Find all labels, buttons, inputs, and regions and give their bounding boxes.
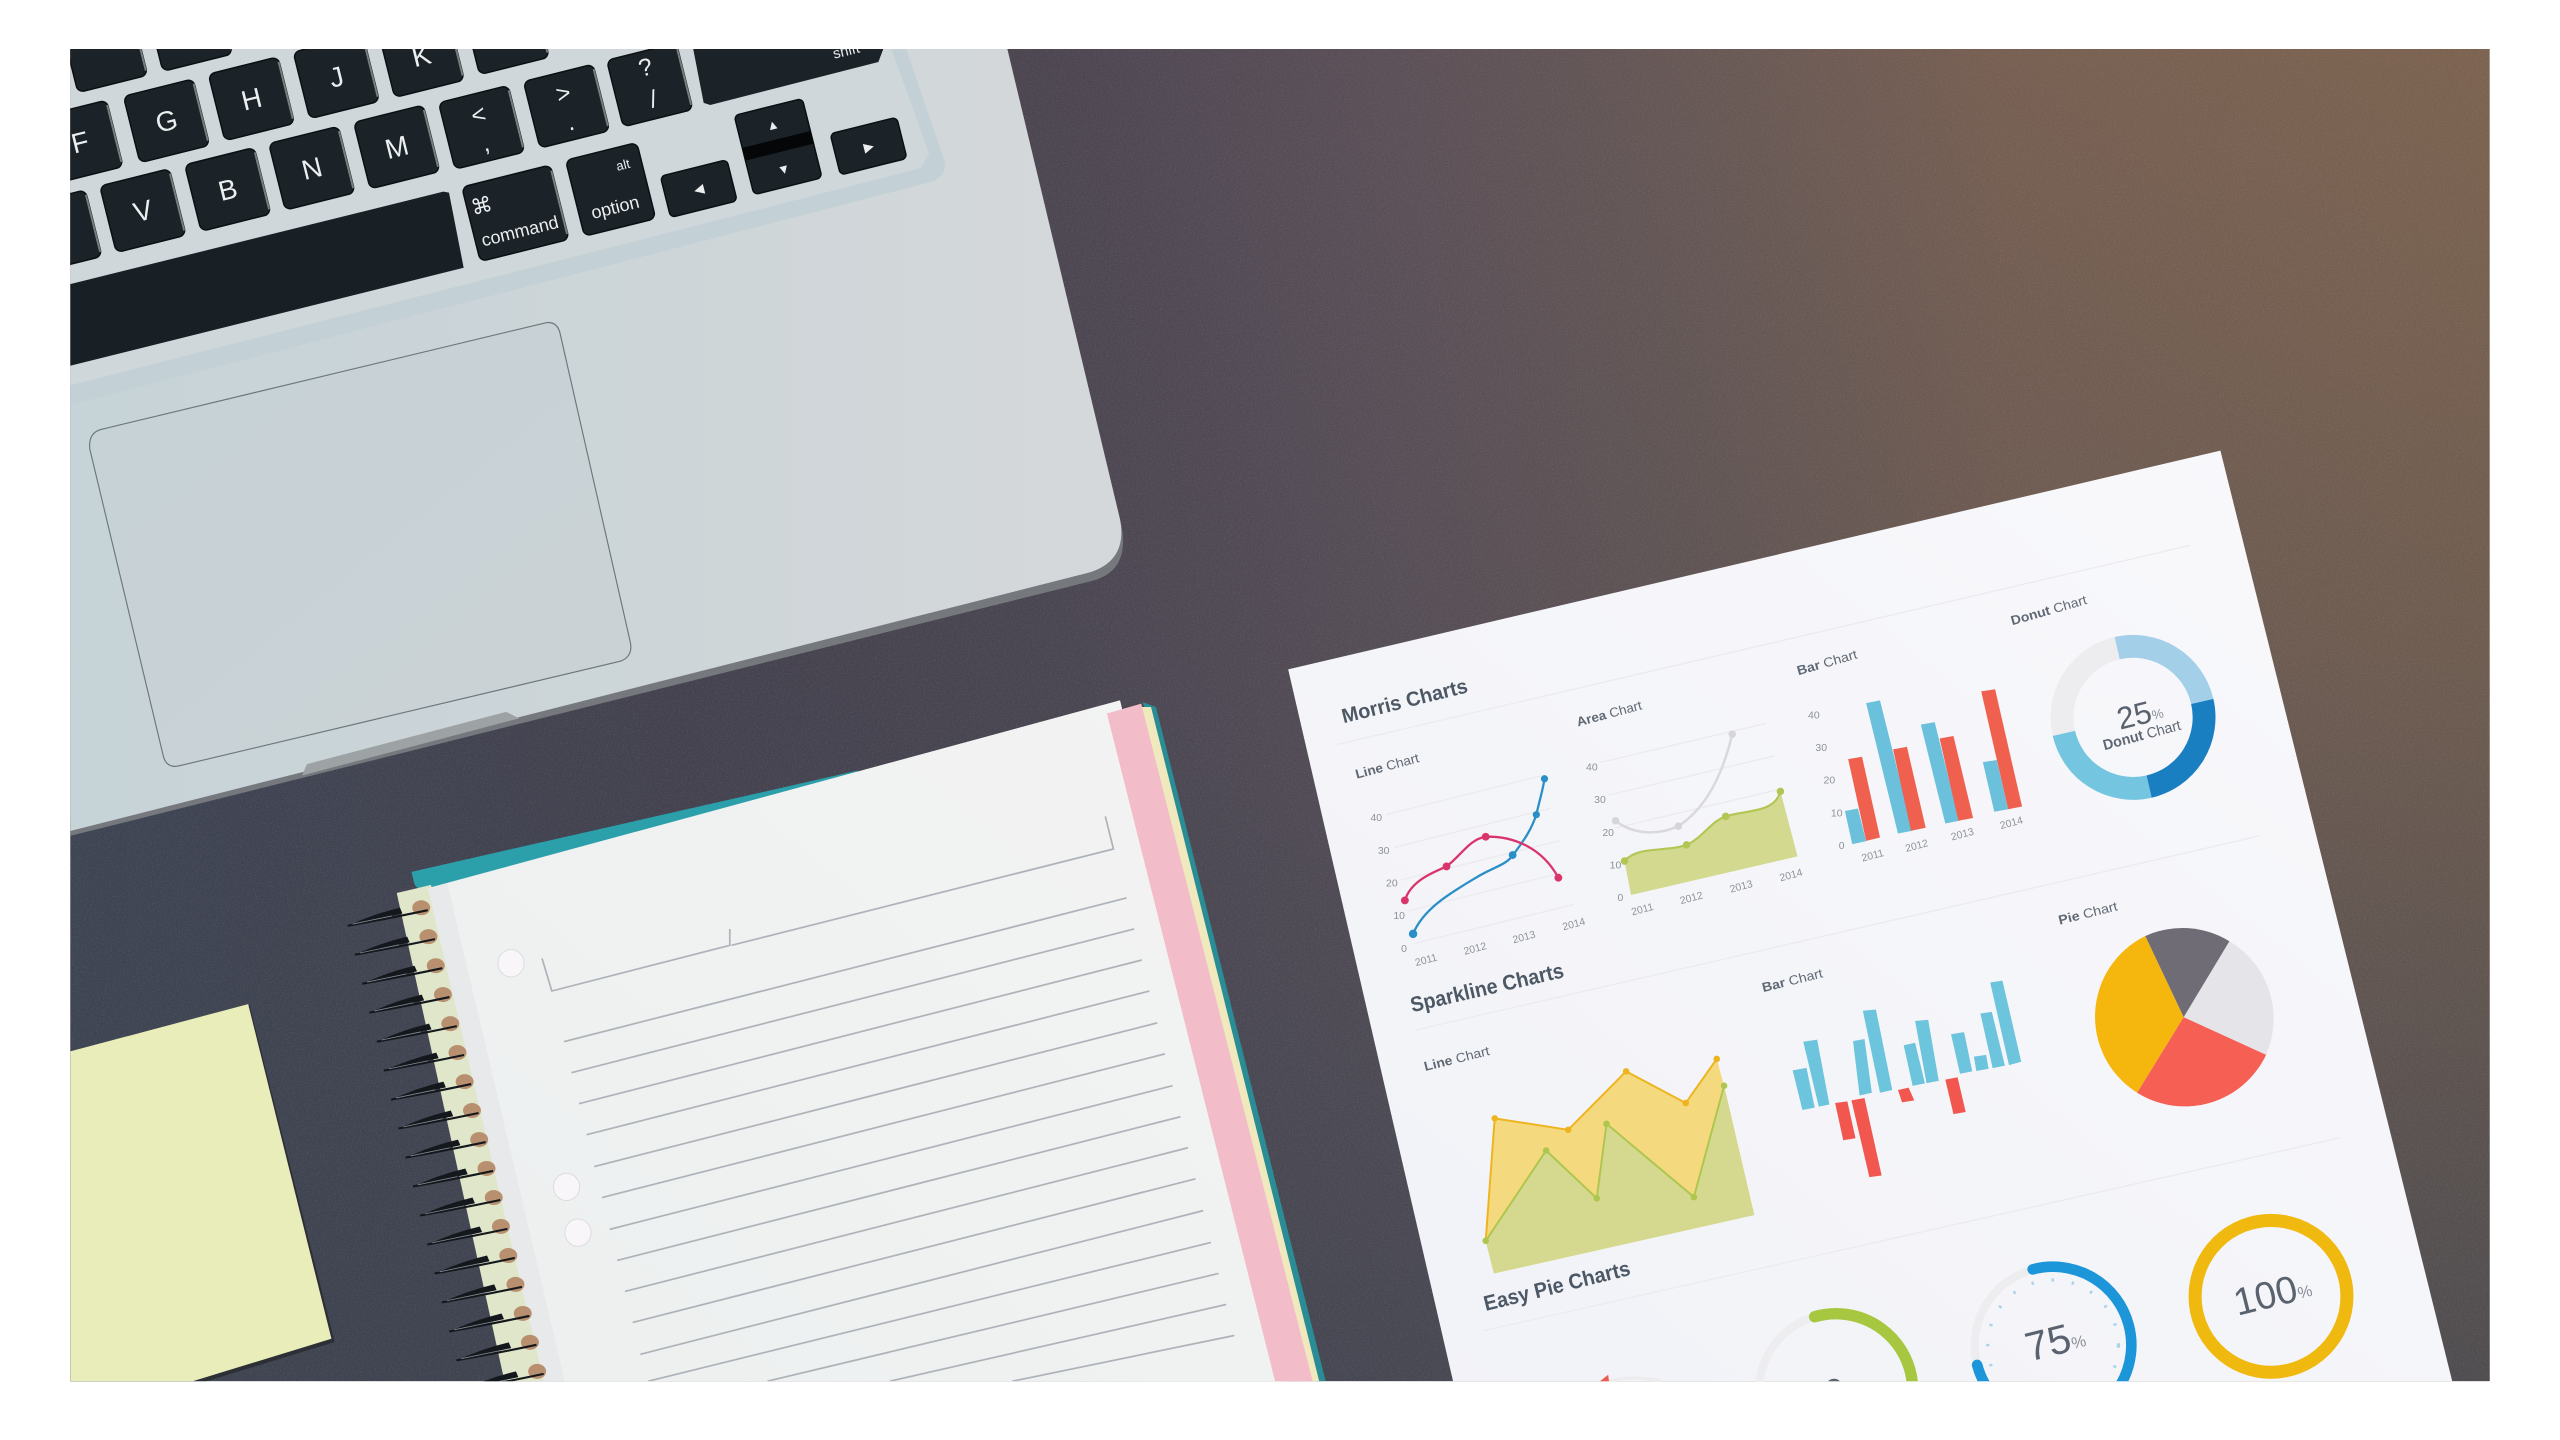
option key: option <box>589 192 641 223</box>
bar chart: 2013 <box>1950 827 1975 843</box>
keyboard well rim <box>458 49 945 304</box>
keyboard keys <box>70 49 907 366</box>
ruled lines <box>564 898 1234 1381</box>
heading: Easy Pie Charts: Easy Pie Charts <box>1481 1257 1633 1316</box>
paper sheet <box>1288 451 2452 1381</box>
area chart: 30 <box>1594 795 1606 806</box>
easy pie: red partial <box>1592 1375 1662 1388</box>
label: sparkline bar chart: Bar Chart <box>1760 965 1825 995</box>
notebook pink divider <box>1107 704 1313 1381</box>
spiral notebook <box>347 700 1326 1390</box>
easy pie: 100 percent ring: % <box>2296 1282 2314 1303</box>
easy pie: green ring <box>1759 1314 1913 1418</box>
laptop <box>70 49 1123 836</box>
punched holes <box>498 950 591 1246</box>
keyboard keys: K <box>409 38 434 73</box>
line chart <box>1354 750 1587 969</box>
line chart: 2013 <box>1512 930 1537 946</box>
area chart <box>1575 698 1804 918</box>
label: pie chart: Pie Chart <box>2057 898 2119 928</box>
keyboard keys: H <box>238 82 265 117</box>
option key: alt <box>614 156 632 174</box>
bar chart: 2014 <box>1999 815 2024 832</box>
right arrow key <box>830 117 907 175</box>
line chart: 2012 <box>1463 941 1488 958</box>
bar chart: 10 <box>1831 808 1843 819</box>
easy pie: 75 percent ring: 75 <box>2020 1315 2076 1370</box>
heading: Sparkline Charts: Sparkline Charts <box>1408 959 1566 1017</box>
keyboard keys: V <box>130 194 156 228</box>
easy pie: 100 percent ring <box>2195 1220 2347 1372</box>
up and down arrow keys: ▲ <box>765 116 781 134</box>
line chart: 30 <box>1378 846 1390 857</box>
laptop front edge <box>70 519 1123 836</box>
line chart: 2011 <box>1414 953 1439 969</box>
bar chart: 2012 <box>1904 838 1930 855</box>
thumb notch <box>302 712 519 776</box>
donut value: % <box>2150 705 2165 723</box>
keyboard keys: < <box>468 100 489 130</box>
keyboard keys: / <box>647 86 660 114</box>
area chart: 2013 <box>1729 879 1754 896</box>
easy pie: 100 percent ring: 100 <box>2229 1267 2302 1325</box>
area chart: 2011 <box>1630 902 1655 918</box>
keyboard keys: , <box>479 130 492 158</box>
keyboard keys: > <box>553 79 574 109</box>
header frame <box>542 816 1113 991</box>
easy pie: 75 percent ring: % <box>2070 1332 2088 1353</box>
pie chart <box>2057 898 2274 1106</box>
bar chart: 2011 <box>1861 848 1885 865</box>
line chart: 2014 <box>1561 917 1587 933</box>
keyboard keys: ? <box>636 53 655 83</box>
area chart: 10 <box>1610 861 1622 872</box>
bar chart: 20 <box>1824 776 1835 787</box>
section dividers <box>1337 545 2341 1331</box>
shift key: shift <box>831 41 861 63</box>
laptop body <box>70 49 1121 831</box>
keyboard well <box>70 49 929 385</box>
label: line chart: Line Chart <box>1354 750 1421 782</box>
label: donut chart: Donut Chart <box>2009 592 2089 628</box>
notebook teal right edge <box>1143 702 1326 1381</box>
bar chart <box>1795 647 2024 865</box>
donut chart: Donut Chart <box>2101 718 2183 754</box>
area chart: 2012 <box>1679 890 1704 907</box>
keyboard keys: . <box>564 109 577 137</box>
line chart: 20 <box>1386 879 1398 890</box>
command key: command <box>479 212 561 250</box>
notebook binding strip <box>397 885 547 1381</box>
label: bar chart: Bar Chart <box>1795 647 1859 678</box>
sparkline bar chart <box>1760 965 2021 1177</box>
line chart: 10 <box>1393 911 1405 922</box>
keyboard keys: G <box>152 103 181 139</box>
donut ring <box>2048 632 2218 803</box>
easy pie: 75 percent ring <box>1975 1267 2131 1424</box>
right arrow key: ▶ <box>862 138 875 155</box>
command key: ⌘ <box>468 192 495 221</box>
notebook page <box>428 700 1282 1381</box>
printed chart sheet <box>1288 451 2452 1424</box>
notebook cream pages <box>1135 707 1319 1381</box>
keyboard keys: N <box>298 151 325 186</box>
space bar <box>70 192 464 366</box>
spiral binding <box>347 900 546 1390</box>
sparkline line chart <box>1422 1043 1754 1273</box>
donut value: 25 <box>2113 694 2155 737</box>
area chart: 2014 <box>1779 868 1804 884</box>
bar chart: 0 <box>1839 841 1845 852</box>
sticky note <box>70 1004 335 1384</box>
area chart: 0 <box>1618 893 1624 904</box>
up and down arrow keys: ▼ <box>776 160 792 178</box>
up and down arrow keys <box>734 99 822 195</box>
area chart: 40 <box>1586 763 1598 774</box>
command key <box>462 165 569 262</box>
trackpad <box>90 323 631 766</box>
keyboard keys: B <box>215 172 241 207</box>
line chart: 40 <box>1371 813 1382 824</box>
keyboard keys: J <box>326 60 347 94</box>
donut chart <box>2009 592 2218 803</box>
line chart: 0 <box>1401 944 1407 955</box>
bar chart: 30 <box>1815 743 1827 754</box>
easy pie: green ring: 50 <box>1801 1369 1850 1418</box>
keyboard keys: F <box>68 125 92 159</box>
label: area chart: Area Chart <box>1575 698 1644 729</box>
notebook teal cover edge <box>411 771 865 898</box>
left arrow key <box>660 160 737 217</box>
area chart: 20 <box>1602 828 1614 839</box>
option key <box>565 142 656 236</box>
heading: Morris Charts: Morris Charts <box>1340 676 1470 728</box>
left arrow key: ◀ <box>692 180 706 197</box>
label: sparkline line chart: Line Chart <box>1422 1043 1491 1074</box>
keyboard keys: M <box>382 129 412 165</box>
bar chart: 40 <box>1808 710 1820 721</box>
shift key <box>693 49 884 105</box>
